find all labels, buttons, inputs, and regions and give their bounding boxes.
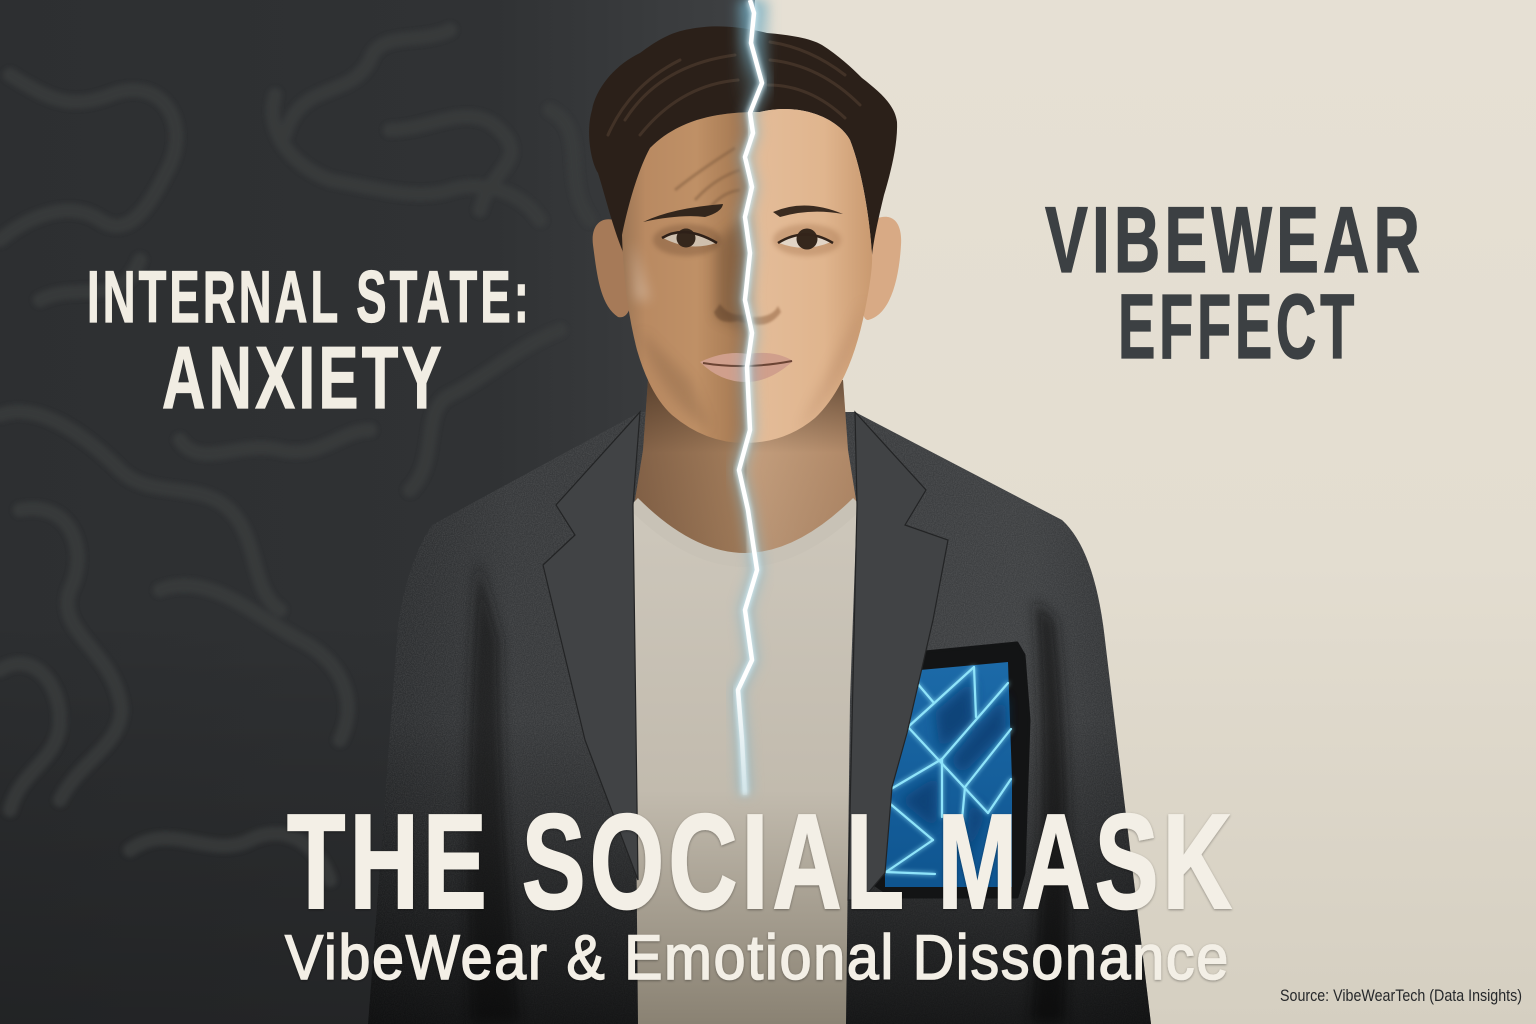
- subtitle: VibeWear & Emotional Dissonance: [285, 923, 1230, 993]
- ear right: [861, 217, 901, 320]
- shirt collar: [633, 503, 858, 560]
- nose: [714, 304, 781, 325]
- background: light vibewear side: [755, 0, 1536, 1024]
- right lapel: [848, 412, 948, 900]
- device: glowing panel: [868, 643, 1029, 897]
- t-shirt: [633, 505, 857, 1024]
- lightning crack divider: [738, 0, 768, 795]
- nose shade: [716, 215, 748, 330]
- right eye: [778, 228, 833, 250]
- hair: [589, 26, 897, 255]
- ear left: [593, 219, 632, 317]
- forehead wrinkles: [675, 148, 740, 210]
- left label: internal state anxiety: INTERNAL STATE:: [87, 257, 532, 338]
- left eyebrow: [643, 204, 723, 222]
- eye socket shade: [653, 224, 721, 256]
- left lapel: [543, 412, 640, 880]
- neck: [634, 380, 857, 562]
- right label: vibewear effect: EFFECT: [1118, 276, 1358, 378]
- lips: [700, 353, 793, 382]
- cheek shade: [645, 341, 705, 424]
- face: [622, 109, 872, 443]
- left eye: [662, 228, 717, 248]
- background squiggle pattern: [0, 30, 590, 880]
- left label: internal state anxiety: ANXIETY: [162, 328, 445, 427]
- right eyebrow: [773, 205, 843, 217]
- left label: internal state anxiety: [87, 257, 532, 427]
- person: [360, 26, 1160, 1024]
- background: dark anxiety side: [0, 0, 756, 1024]
- jacket: [360, 400, 1160, 1024]
- right label: vibewear effect: [1045, 187, 1424, 378]
